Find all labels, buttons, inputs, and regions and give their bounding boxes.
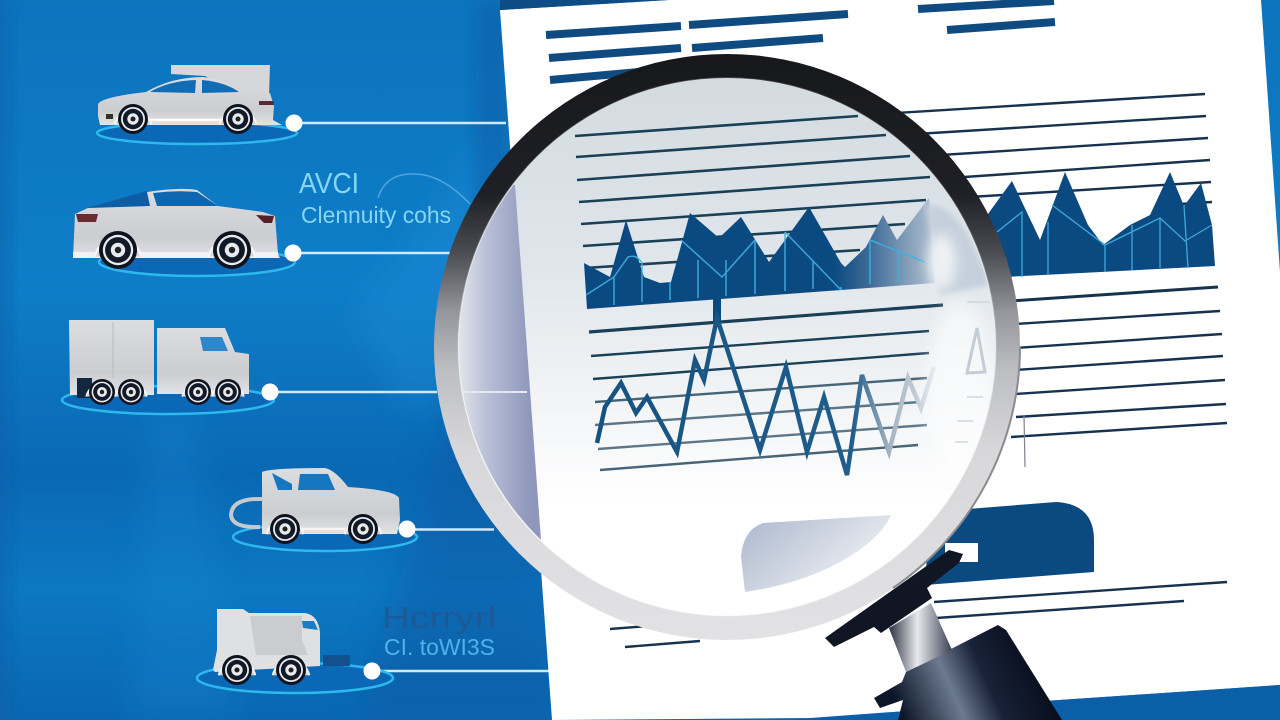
magnifying glass lens <box>430 54 1020 640</box>
report header bars <box>546 1 1055 80</box>
label: AVCI: AVCI <box>299 168 359 200</box>
label: Clennuity cohs: Clennuity cohs <box>301 202 451 228</box>
report button <box>925 502 1094 585</box>
report area chart, right part <box>960 172 1215 280</box>
faint car outline <box>378 174 470 204</box>
magnified button <box>741 515 891 592</box>
blue label: Hcrryrl <box>382 600 496 660</box>
report text lines, lower <box>610 287 1227 647</box>
report page <box>500 0 1280 720</box>
blue label: CI. toWI3S: CI. toWI3S <box>384 634 495 660</box>
blue label: Hcrryrl: Hcrryrl <box>382 600 496 635</box>
vehicle: box truck <box>62 320 274 414</box>
lens inner rim <box>458 78 996 616</box>
magnified line chart <box>597 292 934 475</box>
connector dot 4 <box>398 520 416 538</box>
label: AVCI <box>299 168 451 228</box>
vehicle: small van <box>197 609 393 693</box>
vehicle: sedan with roof box <box>97 65 297 144</box>
magnified glare <box>916 204 990 443</box>
connector dot 5 <box>364 662 380 680</box>
vehicle: coupe <box>73 189 295 276</box>
magnifying glass handle <box>825 550 1062 720</box>
vehicle: SUV with cable <box>231 468 417 551</box>
handle neck <box>889 603 952 672</box>
connector dot 1 <box>286 114 302 132</box>
connector dot 2 <box>284 244 302 262</box>
report text lines, upper <box>880 94 1212 204</box>
connector lines <box>277 123 552 671</box>
magnified view <box>459 114 990 592</box>
magnified area chart <box>584 198 935 309</box>
handle flange <box>825 550 963 647</box>
magnified text lines, lower <box>589 305 943 470</box>
magnified text lines, upper <box>575 116 930 268</box>
connector dot 3 <box>262 384 278 400</box>
handle grip <box>874 625 1062 720</box>
